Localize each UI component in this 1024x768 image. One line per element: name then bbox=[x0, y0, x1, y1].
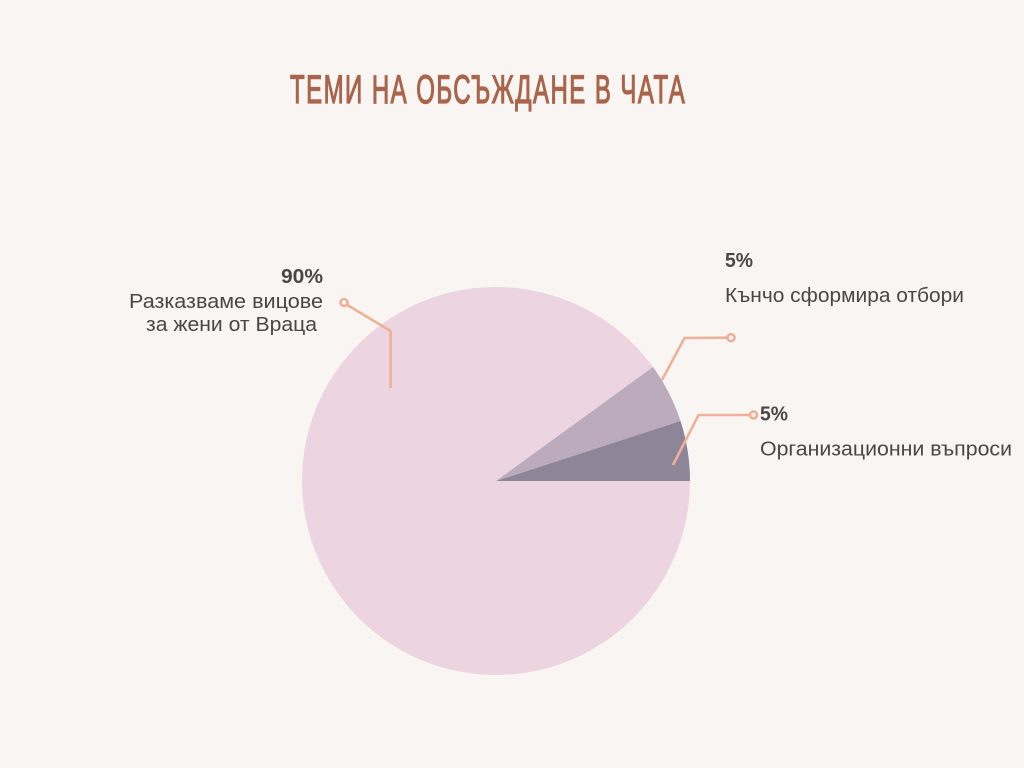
label: 90%: Разказваме вицове bbox=[129, 291, 323, 313]
label: teams bbox=[725, 250, 964, 307]
label: 90%: за жени от Враца bbox=[146, 314, 318, 336]
label: 90%: 90% bbox=[281, 266, 323, 288]
title: ТЕМИ НА ОБСЪЖДАНЕ В ЧАТА bbox=[290, 67, 685, 111]
label: organisational: 5% bbox=[760, 404, 788, 426]
label: teams: 5% bbox=[725, 250, 753, 272]
label: teams: Кънчо сформира отбори bbox=[725, 285, 964, 307]
slice: 90% bbox=[302, 287, 690, 675]
pie chart bbox=[302, 287, 690, 675]
callout line: teams bbox=[662, 334, 734, 380]
label: organisational bbox=[760, 404, 1012, 460]
label: 90% bbox=[129, 266, 323, 336]
slice: 5% organisational bbox=[496, 421, 690, 481]
callout line: organisational bbox=[673, 412, 757, 465]
label: organisational: Организационни въпроси bbox=[760, 438, 1012, 460]
callout line: 90% bbox=[340, 299, 390, 388]
slice: 5% teams bbox=[496, 367, 680, 481]
